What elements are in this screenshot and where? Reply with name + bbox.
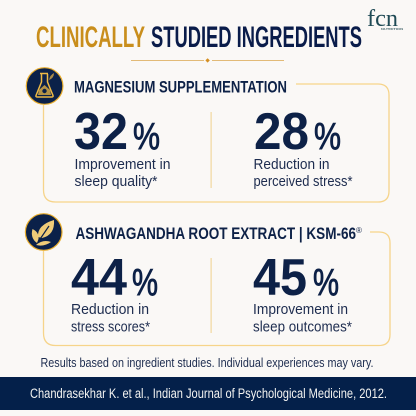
title xyxy=(36,21,362,54)
title ornament xyxy=(131,58,284,63)
stat: 45%: sleep outcomes* xyxy=(253,318,352,336)
stat: 45%: 45 xyxy=(253,249,307,307)
stat: 45%: % xyxy=(313,262,339,304)
panel outline xyxy=(44,84,389,202)
stat: 28%: Reduction in xyxy=(254,156,330,173)
icon: leaf xyxy=(25,214,62,250)
icon: flask xyxy=(26,68,63,104)
panel outline xyxy=(44,232,390,346)
panel: ashwagandha root extract xyxy=(25,214,390,346)
stat: 44% xyxy=(71,249,158,336)
stat: 32%: % xyxy=(133,116,160,158)
heading: magnesium: MAGNESIUM SUPPLEMENTATION xyxy=(74,78,287,96)
divider xyxy=(211,112,212,188)
citation band xyxy=(0,377,416,410)
divider xyxy=(211,258,212,333)
stat: 44%: 44 xyxy=(71,249,127,307)
logo: fcn nutrition: fcn xyxy=(367,6,398,32)
stat: 28% xyxy=(254,103,353,190)
stat: 32% xyxy=(74,103,170,190)
panel: magnesium supplementation xyxy=(26,68,389,202)
stat: 32%: 32 xyxy=(74,103,128,161)
title: CLINICALLY xyxy=(36,21,145,54)
stat: 32%: Improvement in xyxy=(74,156,170,173)
heading: ashwagandha: ASHWAGANDHA ROOT EXTRACT | KSM-66 xyxy=(76,225,356,243)
registered mark: ® xyxy=(356,226,362,235)
stat: 45% xyxy=(253,249,352,336)
stat: 44%: % xyxy=(132,262,158,304)
stat: 28%: perceived stress* xyxy=(254,173,353,190)
stat: 45%: Improvement in xyxy=(253,301,348,318)
logo: fcn nutrition: NUTRITION xyxy=(381,27,403,31)
stat: 44%: Reduction in xyxy=(71,301,149,318)
stat: 28%: % xyxy=(314,116,341,158)
stat: 32%: sleep quality* xyxy=(74,173,158,190)
stat: 44%: stress scores* xyxy=(71,318,150,336)
stat: 28%: 28 xyxy=(254,103,309,161)
